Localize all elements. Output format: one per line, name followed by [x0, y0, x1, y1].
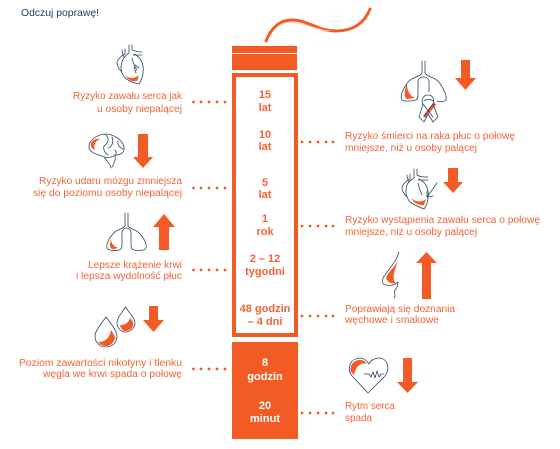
text: nicotine — [19, 358, 182, 380]
arrow: blood down — [143, 306, 164, 332]
right connector dots — [301, 141, 334, 414]
time labels: tygodni — [245, 266, 285, 278]
text: circulation: Lepsze krążenie krwi — [88, 260, 182, 271]
time labels: 8 — [262, 357, 268, 369]
arrow: heart rate down — [397, 358, 418, 393]
text: smell and taste: węchowe i smakowe — [344, 315, 439, 326]
text: heart attack halved: Ryzyko wystąpienia zawału serca o połowę — [345, 215, 540, 226]
icon: nose — [382, 252, 399, 298]
text: lung cancer: mniejsze, niż u osoby palącej — [345, 143, 477, 154]
time labels: minut — [250, 413, 280, 425]
time labels: – 4 dni — [248, 316, 282, 328]
time labels: 10 — [259, 129, 271, 141]
text: heart attack risk — [73, 91, 183, 115]
cigarette filter tip — [232, 46, 297, 70]
time labels: 5 — [262, 177, 268, 189]
title: Odczuj poprawę! — [21, 7, 99, 19]
time labels: godzin — [247, 371, 283, 383]
icon: heart with arrow — [402, 169, 437, 209]
text: heart attack risk: Ryzyko zawału serca jak — [73, 91, 183, 102]
text: smell and taste — [344, 304, 455, 326]
cigarette body frame — [234, 75, 296, 335]
left connector dots — [192, 101, 226, 370]
text: stroke risk: się do poziomu osoby niepalącej — [33, 188, 182, 199]
icon: heart with pulse — [349, 358, 388, 393]
cigarette smoke squiggle — [266, 9, 370, 41]
time labels: 20 — [259, 400, 271, 412]
icon: blood drops — [95, 307, 135, 347]
text: circulation — [76, 260, 182, 282]
time labels — [240, 89, 291, 425]
text: heart attack risk: u osoby niepalącej — [97, 104, 182, 115]
text: nicotine: węgla we krwi spada o połowę — [42, 369, 182, 380]
text: lung cancer: Ryzyko śmierci na raka płuc o połowę — [345, 131, 515, 142]
text: heart rate: spada — [345, 413, 372, 424]
text: stroke risk: Ryzyko udaru mózgu zmniejsza — [39, 176, 182, 187]
burnt section — [232, 342, 298, 439]
time labels: lat — [259, 189, 272, 201]
text: stroke risk — [33, 176, 182, 199]
time labels: lat — [259, 141, 272, 153]
icon: lungs — [107, 213, 146, 251]
arrow: lungs up — [153, 214, 175, 250]
text: heart rate: Rytm serca — [345, 401, 395, 412]
time labels: rok — [256, 226, 274, 238]
text: heart rate — [345, 401, 395, 424]
arrow: nose up — [416, 252, 437, 299]
time labels: lat — [259, 102, 272, 114]
time labels: 2 – 12 — [250, 253, 280, 265]
icon: heart — [117, 45, 143, 84]
arrow: lung cancer down — [455, 60, 476, 90]
time labels: 48 godzin — [240, 303, 291, 315]
text: smell and taste: Poprawiają się doznania — [345, 304, 455, 315]
text: nicotine: Poziom zawartości nikotyny i tlenku — [19, 358, 182, 369]
text: heart attack halved — [345, 215, 540, 238]
time labels: 1 — [262, 213, 268, 225]
arrow: brain down — [133, 134, 153, 168]
arrow: heart down — [443, 168, 463, 193]
text: lung cancer — [345, 131, 515, 154]
text: circulation: i lepsza wydolność płuc — [76, 271, 182, 282]
time labels: 15 — [259, 89, 271, 101]
icon: brain — [89, 134, 124, 168]
text: heart attack halved: mniejsze, niż u osoby palącej — [345, 227, 477, 238]
icon: lungs with ribbon — [401, 61, 446, 122]
